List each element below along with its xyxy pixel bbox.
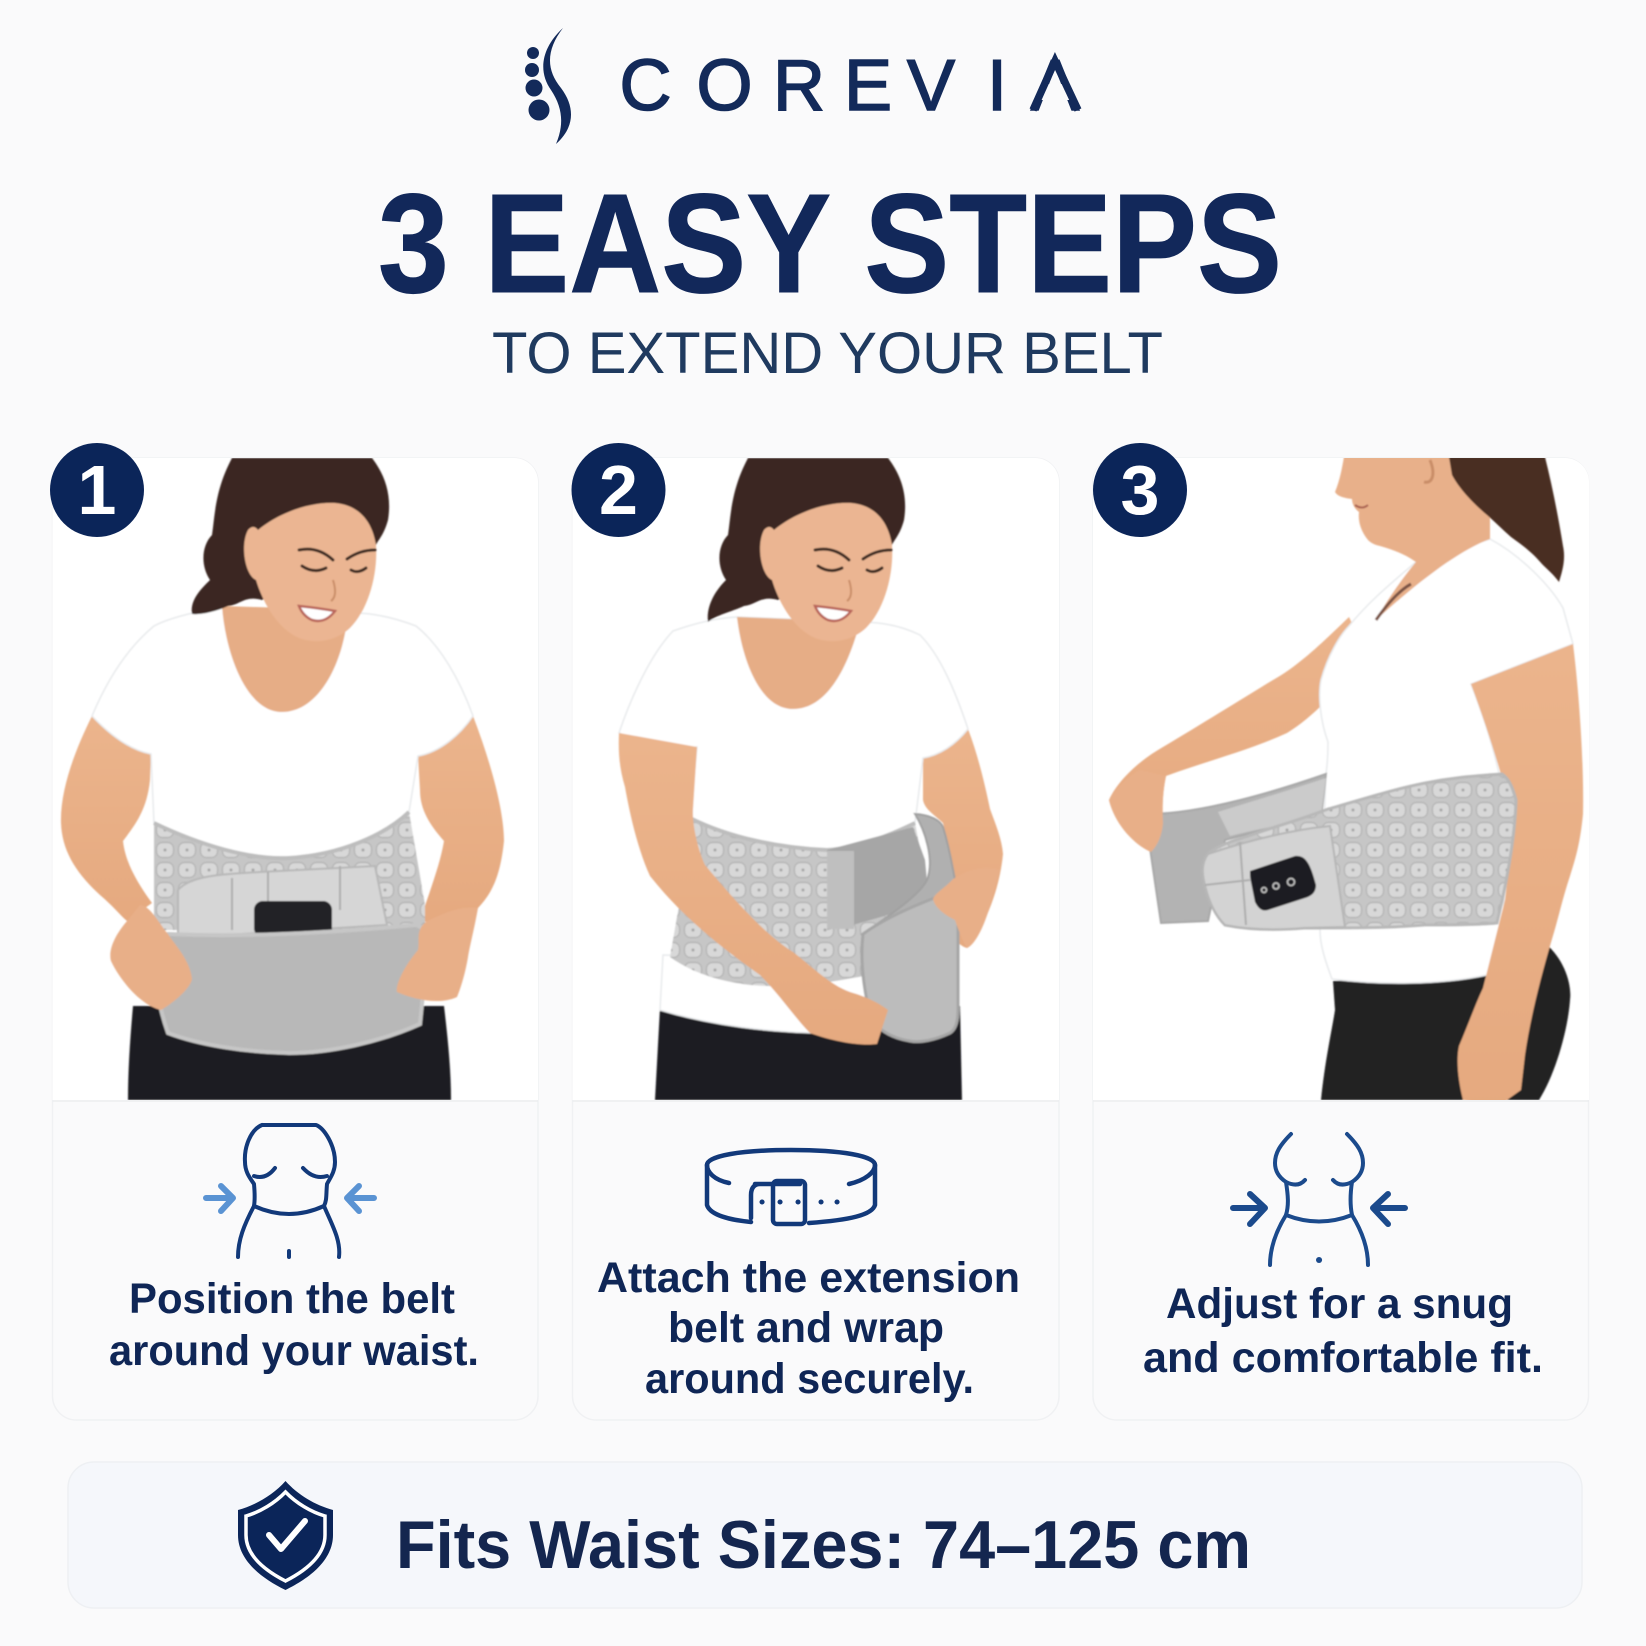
icon: spine mark — [525, 28, 571, 144]
step number badge 3 — [1093, 443, 1187, 537]
panel: step 3 — [1093, 443, 1589, 1420]
subtitle: TO EXTEND YOUR BELT — [492, 321, 1163, 386]
step 1 text: Position the belt — [129, 1275, 455, 1323]
step 2 text: around securely. — [645, 1355, 974, 1403]
step number badge 2 — [572, 443, 666, 537]
panel: step 1 — [50, 443, 538, 1420]
step 3 text: and comfortable fit. — [1143, 1334, 1543, 1382]
icon: waist with dark arrows — [1233, 1134, 1405, 1265]
step number badge 2: 2 — [599, 451, 638, 529]
step number badge 1: 1 — [78, 451, 116, 529]
step 3 text — [1143, 1280, 1543, 1382]
panel: step 2 — [572, 443, 1059, 1420]
step 2 text — [597, 1254, 1020, 1403]
photo: woman attaching extension belt — [619, 458, 1003, 1100]
panel: waist size bar — [68, 1462, 1582, 1608]
step number badge 3: 3 — [1121, 451, 1159, 529]
photo: woman adjusting belt, side view — [1109, 457, 1583, 1105]
icon: waist with light arrows — [206, 1125, 374, 1257]
step 1 text: around your waist. — [109, 1327, 479, 1375]
icon: shield with check — [238, 1481, 333, 1590]
step 2 text: Attach the extension — [597, 1254, 1020, 1302]
step 2 text: belt and wrap — [668, 1304, 944, 1352]
logo wordmark: COREVIA — [620, 46, 1079, 126]
title: 3 EASY STEPS — [378, 164, 1282, 322]
photo: woman positioning belt — [61, 458, 504, 1100]
icon: belt with buckle — [707, 1150, 875, 1224]
step 1 text — [109, 1275, 479, 1375]
logo: Corevia — [525, 28, 1079, 144]
step number badge 1 — [50, 443, 144, 537]
waist size text: Fits Waist Sizes: 74–125 cm — [396, 1507, 1251, 1583]
step 3 text: Adjust for a snug — [1166, 1280, 1513, 1328]
